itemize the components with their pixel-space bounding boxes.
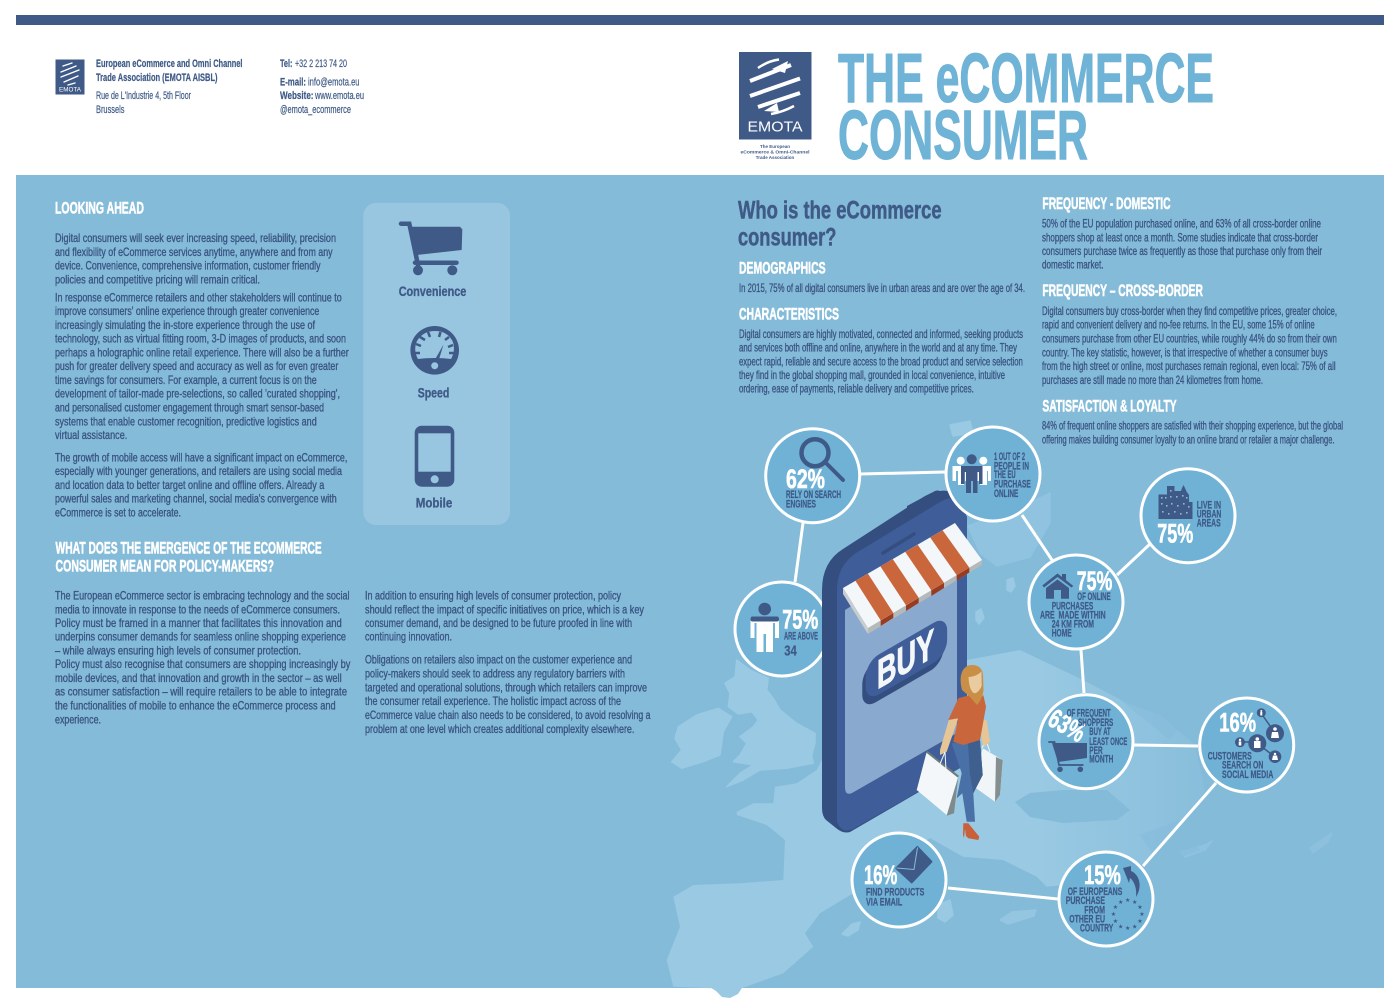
circle: 62% search engines: 62%	[786, 464, 825, 494]
darker sea areas	[1015, 660, 1200, 865]
heading: who is the ecommerce consumer	[738, 196, 942, 252]
icon: EU stars: ★	[1125, 925, 1130, 932]
text block: characteristics: expect rapid, reliable and secure access to the broad product and service selection	[739, 355, 1023, 368]
heading: policy-makers: WHAT DOES THE EMERGENCE OF THE ECOMMERCE	[56, 538, 322, 558]
circle: 63% buy monthly: BUY AT	[1089, 726, 1111, 738]
text block: policy column two: eCommerce value chain also needs to be considered, to avoid resolving a	[365, 709, 651, 722]
text block: looking ahead: powerful sales and marketing channel, social media's convergence with	[55, 492, 337, 506]
circle: 15% cross-border: OF EUROPEANS	[1068, 886, 1122, 898]
text block: frequency cross-border	[1042, 305, 1337, 387]
circle: 16% social media: SEARCH ON	[1222, 760, 1263, 772]
large EMOTA logo: EMOTA	[748, 118, 802, 136]
small EMOTA logo	[56, 60, 84, 94]
circle: 63% buy monthly: SHOPPERS	[1078, 717, 1113, 729]
circle: 15% cross-border: 15%	[1084, 860, 1121, 890]
icon: EU stars: ★	[1132, 924, 1137, 930]
circle: 75% within 24 km: HOME	[1052, 628, 1072, 640]
text block: characteristics: and services both offline and online, anywhere in the world and at any time. They	[739, 342, 1017, 355]
small EMOTA logo: EMOTA	[59, 86, 82, 94]
icon: city buildings	[1158, 485, 1192, 519]
circle: 62% search engines: ENGINES	[786, 499, 816, 511]
BUY button: BUY	[877, 619, 934, 699]
top bar	[16, 15, 1384, 25]
text block: policy column two: should reflect the impact of specific initiatives on price, which is a key	[365, 603, 644, 616]
icon: social network	[1235, 708, 1284, 763]
icon: EU stars: ★	[1118, 924, 1123, 930]
icon: magnifier	[802, 439, 843, 480]
circle: 75% above 34: ARE ABOVE	[784, 631, 818, 643]
icon: EU stars	[1111, 897, 1145, 932]
circle: 16% email: 16%	[864, 860, 897, 890]
circle: 16% social media	[1200, 698, 1294, 792]
heading: satisfaction and loyalty: SATISFACTION & LOYALTY	[1042, 396, 1177, 416]
text block: policy column one: – while always ensuring high levels of consumer protection.	[55, 644, 301, 657]
text block: looking ahead: especially with younger generations, and retailers are using social media	[55, 465, 342, 478]
text block: looking ahead: eCommerce is set to accelerate.	[55, 506, 181, 519]
large EMOTA logo	[739, 52, 812, 160]
circle: 75% within 24 km: PURCHASES	[1052, 600, 1093, 612]
circle: 75% live in urban areas	[1141, 469, 1235, 563]
icon: EU stars: ★	[1137, 918, 1143, 925]
label: mobile: Mobile	[416, 494, 452, 510]
text block: looking ahead: device. Convenience, comprehensive information, customer friendly	[55, 260, 321, 272]
face	[968, 672, 982, 693]
heading: frequency domestic: FREQUENCY - DOMESTIC	[1042, 194, 1171, 213]
connector lines	[795, 472, 1216, 899]
circle: 63% buy monthly: OF FREQUENT	[1067, 708, 1111, 720]
phone button	[907, 490, 941, 514]
circle: 75% within 24 km: ARE MADE WITHIN	[1040, 609, 1106, 621]
heading: demographics: DEMOGRAPHICS	[739, 258, 826, 277]
icon: EU stars: ★	[1113, 918, 1118, 925]
icon: EU stars: ★	[1113, 904, 1118, 911]
icon: speedometer	[410, 326, 459, 375]
contact details: info@emota.eu	[308, 76, 360, 88]
text block: policy column two: problem at one level which creates additional complexity elsewhere.	[365, 723, 634, 736]
icon: shopping cart	[401, 224, 462, 275]
contact details: +32 2 213 74 20	[295, 58, 347, 70]
large EMOTA logo: Trade Association	[756, 155, 795, 160]
text block: looking ahead: The growth of mobile access will have a significant impact on eCommerce,	[55, 451, 347, 464]
circle: 62% search engines: RELY ON SEARCH	[786, 489, 841, 501]
label: speed: Speed	[418, 384, 449, 400]
BUY button	[862, 612, 947, 710]
icon: house	[1042, 574, 1073, 599]
circle: 16% email	[852, 833, 946, 927]
text block: frequency cross-border: purchases are still made no more than 24 kilometres from home.	[1042, 374, 1263, 387]
circle: 75% within 24 km	[1029, 555, 1123, 649]
title: CONSUMER	[838, 96, 1088, 174]
circle: 63% buy monthly: MONTH	[1089, 754, 1113, 766]
contact details: @emota_ecommerce	[280, 104, 351, 116]
circle: 75% within 24 km: OF ONLINE	[1077, 591, 1111, 603]
heading: who is the ecommerce consumer: consumer?	[738, 224, 836, 252]
association address	[96, 58, 242, 116]
circle: 75% live in urban areas: LIVE IN	[1197, 499, 1221, 511]
circle: 75% above 34: 34	[784, 643, 797, 660]
text block: looking ahead: technology, such as virtual fitting room, 3-D images of products, and soon	[55, 333, 346, 346]
icon: person	[750, 603, 779, 652]
text block: looking ahead: virtual assistance.	[55, 429, 127, 442]
phone screen	[845, 540, 957, 794]
phone speaker	[883, 534, 914, 553]
icon: EU stars: ★	[1111, 911, 1116, 918]
label: convenience: Convenience	[399, 283, 466, 299]
heading: who is the ecommerce consumer: Who is the eCommerce	[738, 196, 942, 224]
woman shopper	[917, 665, 1003, 840]
icon: envelope	[896, 847, 932, 883]
icon: EU stars: ★	[1125, 897, 1130, 904]
icon: EU stars: ★	[1118, 899, 1123, 906]
circle: 63% buy monthly	[1039, 695, 1133, 789]
text block: demographics: In 2015, 75% of all digital consumers live in urban areas and are over the age of 34.	[739, 282, 1025, 295]
phone illustration	[822, 490, 982, 832]
shoe	[963, 823, 979, 840]
left bag	[917, 752, 958, 815]
text block: policy column two: policy-makers should seek to address any regulatory barriers with	[365, 667, 625, 680]
circle: 16% email: VIA EMAIL	[866, 896, 902, 908]
text block: looking ahead: time savings for consumers. For example, a current focus is on the	[55, 374, 317, 387]
contact details	[280, 58, 364, 116]
shirt	[948, 695, 986, 745]
contact details: Tel:	[280, 58, 292, 70]
circle: 15% cross-border: FROM	[1084, 904, 1105, 916]
text block: policy column one: the functionalities of mobile to enhance the eCommerce process and	[55, 700, 336, 713]
contact details: E-mail:	[280, 76, 306, 88]
circle: 15% cross-border: PURCHASE	[1066, 895, 1105, 907]
icon: mobile phone	[415, 426, 454, 487]
text block: looking ahead: push for greater delivery speed and accuracy as well as for even greater	[55, 360, 338, 373]
circle: 75% within 24 km: 24 KM FROM	[1052, 619, 1094, 631]
contact details: www.emota.eu	[314, 90, 364, 102]
text block: policy column one: underpins consumer demands for seamless online shopping experience	[55, 631, 346, 644]
map of Europe	[667, 421, 1332, 998]
jeans	[952, 740, 983, 822]
association address: Brussels	[96, 104, 125, 116]
heading: looking ahead: LOOKING AHEAD	[55, 198, 144, 218]
text block: policy column one: as consumer satisfaction – will require retailers to be able to integrate	[55, 686, 347, 699]
icon: curved arrow	[1123, 866, 1140, 897]
circle: 16% social media: 16%	[1219, 708, 1256, 738]
icon: EU stars: ★	[1132, 899, 1137, 906]
association address: European eCommerce and Omni Channel	[96, 58, 242, 70]
hair	[961, 665, 984, 705]
icon: EU stars: ★	[1137, 904, 1143, 911]
circle: 75% within 24 km: 75%	[1077, 566, 1112, 596]
text block: characteristics: ordering, ease of payments, reliable delivery and competitive prices.	[739, 383, 974, 396]
text block: characteristics: they find in the global shopping mall, grounded in local convenience, intuitive	[739, 369, 1005, 382]
text block: policy column two: continuing innovation.	[365, 631, 452, 644]
circle: 1 out of 2: PEOPLE IN	[994, 460, 1029, 472]
text block: policy column two	[365, 590, 651, 736]
text block: looking ahead: Digital consumers will seek ever increasing speed, reliability, precision	[55, 232, 336, 245]
text block: policy column two: Obligations on retailers also impact on the customer experience and	[365, 653, 632, 666]
left arm	[940, 718, 958, 755]
circle: 1 out of 2: 1 OUT OF 2	[994, 451, 1025, 463]
heading: policy-makers: CONSUMER MEAN FOR POLICY-MAKERS?	[56, 556, 274, 576]
main blue panel	[16, 175, 1384, 988]
text block: looking ahead	[55, 232, 349, 519]
text block: policy column one: The European eCommerce sector is embracing technology and the social	[55, 590, 350, 603]
circle: 63% buy monthly: LEAST ONCE	[1089, 736, 1127, 748]
contact details: Website:	[280, 90, 314, 102]
circle: 62% search engines	[766, 429, 860, 523]
circle: 15% cross-border	[1059, 852, 1153, 946]
circle: 75% live in urban areas: AREAS	[1197, 518, 1221, 530]
large EMOTA logo: eCommerce & Omni-Channel	[740, 150, 810, 154]
text block: policy column two: In addition to ensuring high levels of consumer protection, policy	[365, 590, 621, 603]
text block: looking ahead: systems that enable customer recognition, predictive logistics and	[55, 415, 317, 428]
text block: policy column two: targeted and operational solutions, through which retailers can improve	[365, 681, 647, 694]
large EMOTA logo: The European	[760, 144, 790, 149]
text block: looking ahead: In response eCommerce retailers and other stakeholders will continue to	[55, 291, 342, 304]
text block: satisfaction and loyalty	[1042, 420, 1343, 447]
circle: 63% buy monthly: PER	[1089, 745, 1103, 757]
text block: policy column two: the consumer retail experience. The holistic impact across of the	[365, 695, 621, 708]
awning	[843, 523, 982, 634]
heading: frequency cross-border: FREQUENCY – CROSS-BORDER	[1042, 281, 1203, 300]
icon: shopping cart small	[1048, 742, 1087, 772]
text block: policy column one: Policy must be framed in a manner that facilitates this innovation and	[55, 617, 342, 630]
text block: characteristics: Digital consumers are highly motivated, connected and informed, seeking products	[739, 328, 1023, 341]
text block: looking ahead: policies and competitive pricing will remain critical.	[55, 273, 260, 286]
association address: Rue de L'Industrie 4, 5th Floor	[96, 90, 191, 102]
panel: convenience, speed, mobile	[363, 203, 510, 525]
text block: looking ahead: and flexibility of eCommerce services anytime, anywhere and from any	[55, 246, 333, 259]
text block: policy column one	[55, 590, 351, 726]
text block: looking ahead: and personalised customer engagement through smart sensor-based	[55, 402, 324, 414]
text block: frequency domestic	[1042, 218, 1322, 272]
text block: policy column one: experience.	[55, 713, 101, 726]
circle: 75% live in urban areas: URBAN	[1197, 509, 1221, 521]
circle: 63% buy monthly: 63%	[1043, 703, 1091, 748]
circle: 1 out of 2: PURCHASE	[994, 478, 1031, 490]
circle: 1 out of 2	[946, 427, 1040, 521]
text block: looking ahead: perhaps a holographic online retail experience. There will also be a further	[55, 346, 349, 359]
circle: 15% cross-border: OTHER EU	[1069, 913, 1105, 925]
text block: policy column one: Policy must also recognise that consumers are shopping increasingly by	[55, 658, 351, 671]
text block: frequency domestic: domestic market.	[1042, 259, 1104, 272]
right bag	[974, 748, 1003, 802]
circle: 15% cross-border: COUNTRY	[1080, 922, 1114, 934]
circle: 16% email: FIND PRODUCTS	[866, 887, 924, 899]
heading: characteristics: CHARACTERISTICS	[739, 304, 839, 323]
text block: looking ahead: and location data to better target online and offline offers. Already a	[55, 479, 325, 492]
circle: 16% social media: CUSTOMERS	[1208, 750, 1252, 762]
circle: 75% above 34: 75%	[782, 604, 818, 634]
text block: policy column one: mobile devices, and that innovation and growth in the sector – as well	[55, 672, 342, 685]
icon: EU stars: ★	[1139, 911, 1145, 918]
icon: people	[952, 454, 991, 493]
association address: Trade Association (EMOTA AISBL)	[96, 72, 218, 84]
text block: looking ahead: improve consumers' online experience through greater convenience	[55, 305, 319, 318]
circle: 1 out of 2: ONLINE	[994, 488, 1018, 500]
text block: looking ahead: development of tailor-made pre-selections, so called 'curated shopping',	[55, 388, 340, 401]
text block: policy column two: consumer demand, and be designed to be future proofed in line with	[365, 617, 632, 630]
right arm	[980, 720, 990, 747]
title	[838, 39, 1214, 174]
circle: 1 out of 2: THE EU	[994, 469, 1016, 481]
circle: 75% above 34	[735, 582, 829, 676]
circle: 16% social media: SOCIAL MEDIA	[1222, 769, 1273, 781]
text block: looking ahead: increasingly simulating the in-store experience through the use of	[55, 319, 316, 332]
circle: 75% live in urban areas: 75%	[1157, 518, 1193, 548]
text block: characteristics	[739, 328, 1023, 396]
text block: policy column one: media to innovate in response to the needs of eCommerce consumers.	[55, 603, 340, 616]
heading: policy-makers	[56, 538, 322, 576]
